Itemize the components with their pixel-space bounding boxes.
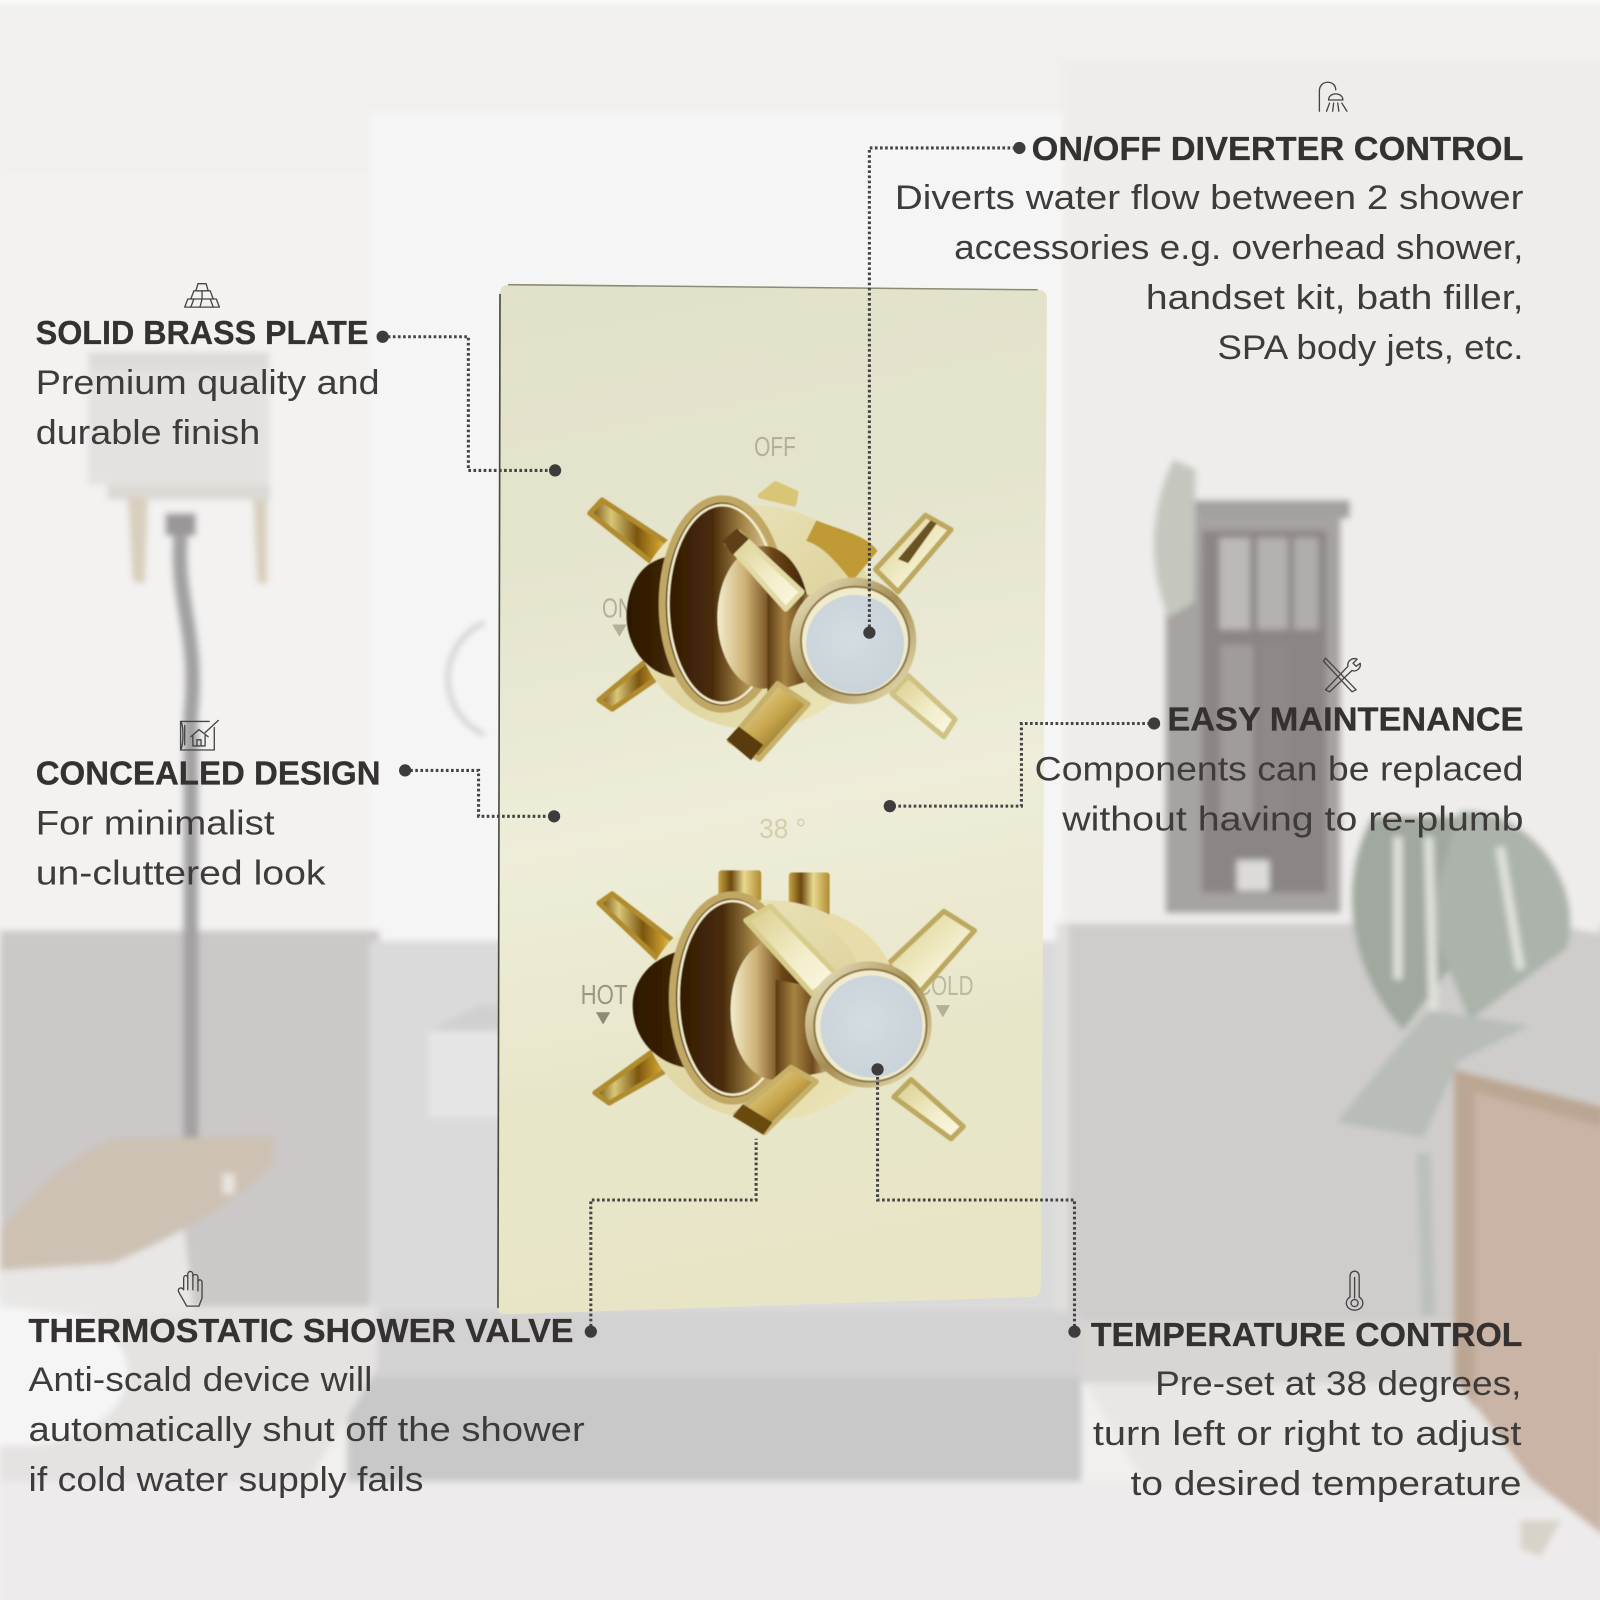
plate markings: HOT [581, 979, 628, 1010]
callout: on/off diverter control: SPA body jets, etc. [1217, 329, 1523, 367]
connector: concealed design [399, 764, 560, 822]
callout: concealed design: un-cluttered look [36, 855, 327, 893]
callout: on/off diverter control: accessories e.g. overhead shower, [954, 229, 1523, 267]
callout: temperature control [1091, 1271, 1522, 1503]
icon: shower head [1319, 82, 1347, 111]
connector: on/off diverter [863, 142, 1026, 639]
valve plate [498, 285, 1047, 1314]
callout: solid brass plate: SOLID BRASS PLATE [36, 315, 368, 352]
lower control handle: temperature [595, 870, 974, 1139]
callout: easy maintenance: EASY MAINTENANCE [1167, 702, 1523, 739]
plate markings: 38 ° [759, 813, 806, 844]
icon: gold bars [185, 284, 219, 307]
icon: crossed tools [1323, 658, 1360, 692]
callout: easy maintenance [1035, 658, 1523, 839]
callout: solid brass plate: Premium quality and [36, 364, 380, 402]
connector: solid brass plate [377, 331, 561, 477]
plate markings: ON [602, 592, 633, 623]
callout: temperature control: Pre-set at 38 degrees, [1155, 1365, 1521, 1403]
callout: temperature control: TEMPERATURE CONTROL [1091, 1317, 1522, 1354]
callout: thermostatic shower valve: if cold water supply fails [29, 1461, 423, 1499]
callout: thermostatic shower valve: Anti-scald device will [29, 1361, 372, 1399]
icon: thermometer [1346, 1271, 1363, 1310]
callout: solid brass plate: durable finish [36, 414, 260, 452]
callout: temperature control: turn left or right to adjust [1093, 1415, 1522, 1453]
callout: easy maintenance: without having to re-plumb [1061, 801, 1523, 839]
callout: easy maintenance: Components can be replaced [1035, 751, 1523, 789]
callout: concealed design: CONCEALED DESIGN [36, 756, 381, 793]
upper knob cap [790, 578, 916, 704]
connector: easy maintenance [884, 717, 1160, 812]
callout: thermostatic shower valve: automatically shut off the shower [29, 1411, 585, 1449]
callout: on/off diverter control [895, 82, 1523, 367]
window and plant behind right text [1184, 500, 1350, 518]
callout: concealed design [36, 720, 381, 893]
callout: concealed design: For minimalist [36, 805, 275, 843]
plate markings: COLD [916, 970, 973, 1001]
icon: house plan with pencil [181, 720, 218, 750]
callout: on/off diverter control: ON/OFF DIVERTER CONTROL [1032, 131, 1523, 168]
upper control handle: on/off diverter [590, 484, 955, 760]
callout: on/off diverter control: Diverts water flow between 2 shower [895, 179, 1523, 217]
callout: solid brass plate [36, 284, 380, 452]
plate markings: OFF [754, 431, 796, 462]
connector: thermostatic valve [585, 1139, 756, 1338]
icon: hand [178, 1271, 202, 1306]
callout: thermostatic shower valve: THERMOSTATIC SHOWER VALVE [29, 1313, 573, 1350]
callout: on/off diverter control: handset kit, bath filler, [1146, 279, 1523, 317]
connector: temperature control [871, 1063, 1081, 1338]
plate markings [581, 431, 973, 1024]
callout: thermostatic shower valve [29, 1271, 585, 1499]
callout: temperature control: to desired temperature [1131, 1465, 1521, 1503]
lower knob cap [805, 961, 932, 1088]
